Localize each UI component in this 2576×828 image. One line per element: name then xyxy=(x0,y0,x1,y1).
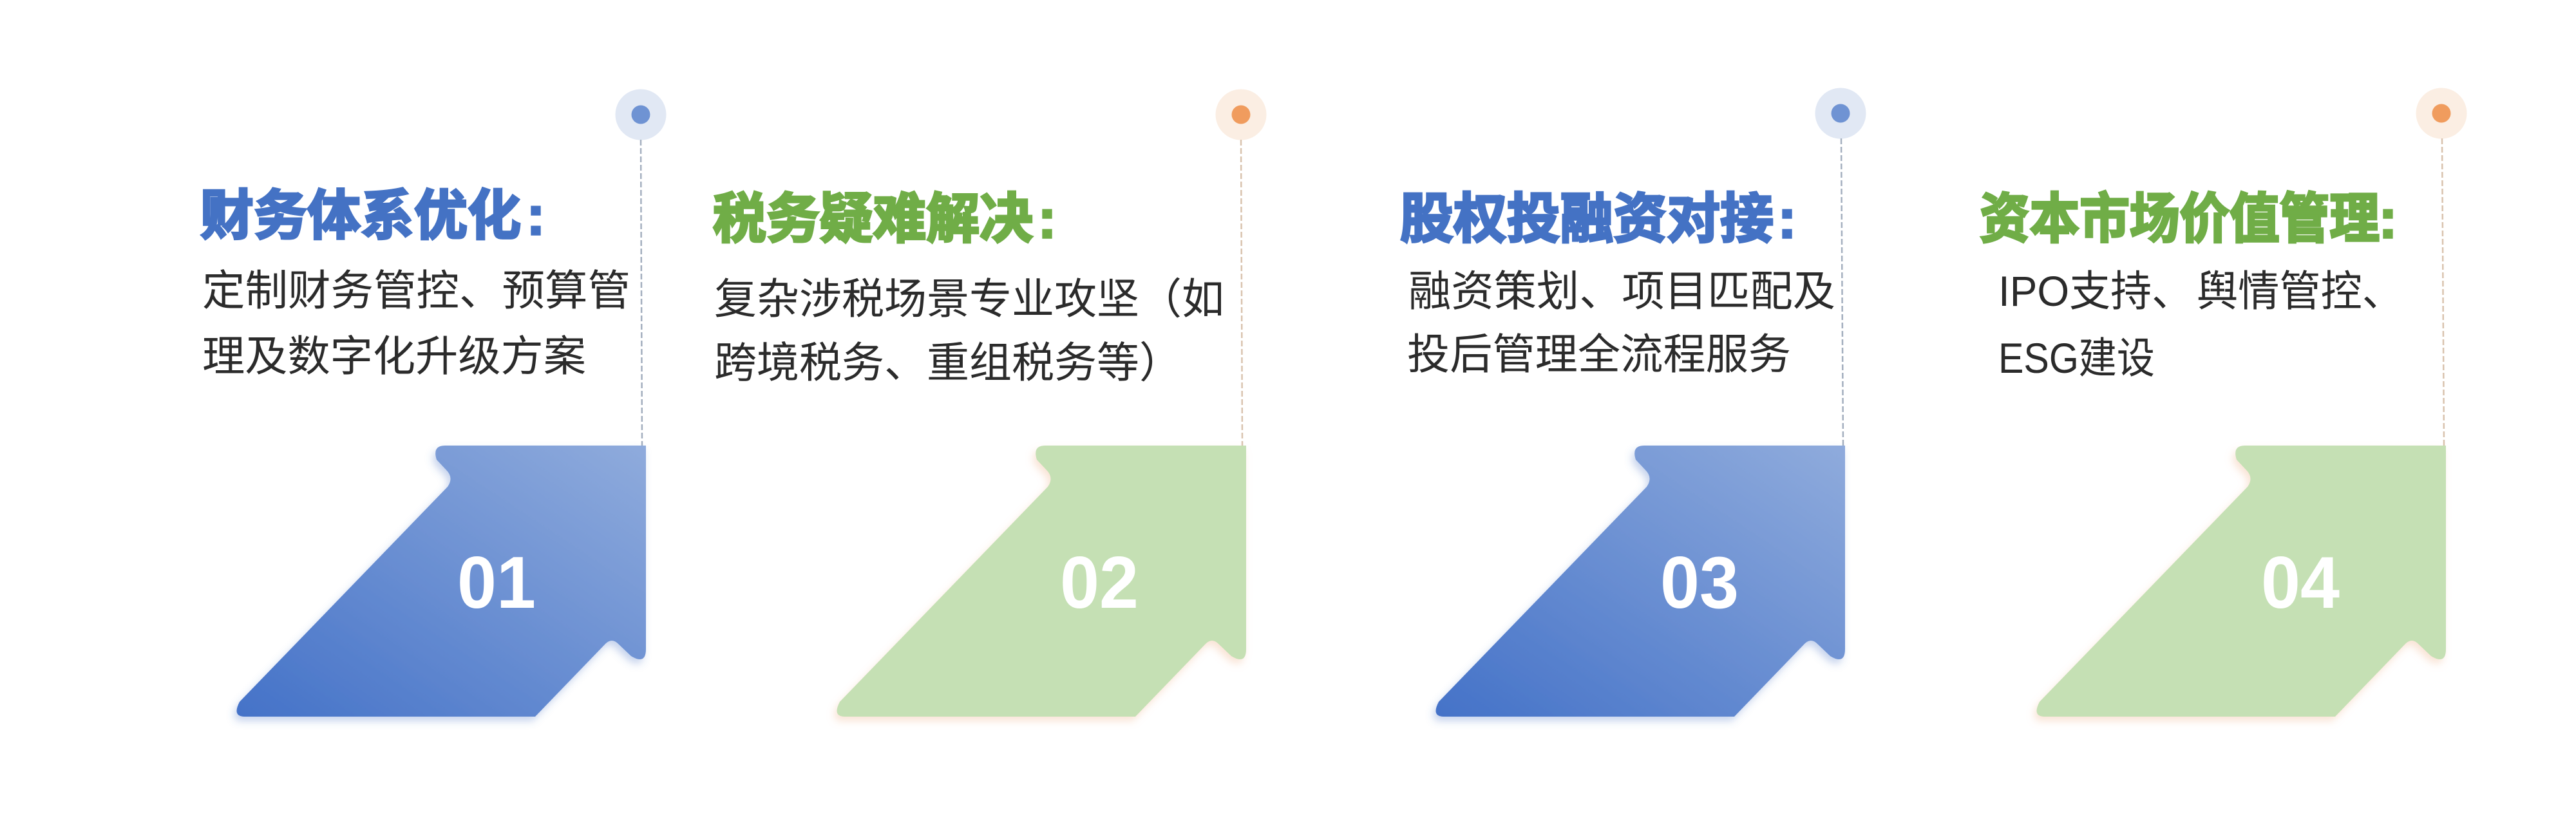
body text: ESG建设 xyxy=(1998,334,2155,382)
heading: : xyxy=(1778,189,1796,249)
marker dot: orange xyxy=(2416,88,2467,139)
body text: IPO支持、 xyxy=(1998,267,2193,315)
number 04: 04 xyxy=(2261,542,2340,624)
body text: 投后管理全流程服务 xyxy=(1407,330,1791,378)
dashed connector line xyxy=(1241,140,1242,446)
heading: 股权投融资对接 xyxy=(1400,189,1774,249)
body text xyxy=(1998,267,2403,382)
panel: 04 capital market value management xyxy=(1980,88,2467,717)
panel: 02 tax problem solving xyxy=(713,89,1266,717)
heading: 税务疑难解决 xyxy=(713,189,1033,249)
number 02: 02 xyxy=(1060,542,1139,624)
body text xyxy=(1407,267,1835,378)
heading: : xyxy=(1038,189,1056,249)
arrow block 01 xyxy=(237,446,646,717)
arrow block 04 xyxy=(2036,446,2446,717)
marker dot: orange xyxy=(1216,89,1266,140)
body text: 定制财务管控、预算管 xyxy=(202,267,630,314)
body text xyxy=(714,275,1224,386)
body text: 理及数字化升级方案 xyxy=(202,332,586,380)
marker dot: blue xyxy=(1815,88,1866,139)
heading: : xyxy=(527,185,545,246)
dashed connector line xyxy=(641,140,642,446)
number 03: 03 xyxy=(1660,542,1739,624)
panel: 01 financial system optimisation xyxy=(200,89,666,717)
body text xyxy=(202,267,630,380)
body text: 融资策划、项目匹配及 xyxy=(1408,267,1835,315)
dashed connector line xyxy=(1841,138,1843,446)
panel: 03 equity financing xyxy=(1400,88,1866,717)
heading: 财务体系优化 xyxy=(200,185,521,246)
body text: 跨境税务、重组税务等） xyxy=(714,339,1182,386)
number 01: 01 xyxy=(457,542,536,624)
body text: 复杂涉税场景专业攻坚（如 xyxy=(714,275,1224,323)
arrow block 03 xyxy=(1436,446,1845,717)
dashed connector line xyxy=(2442,138,2444,446)
arrow block 02 xyxy=(837,446,1246,717)
body text: 舆情管控、 xyxy=(2197,267,2403,315)
heading: : xyxy=(2379,189,2397,249)
heading: 资本市场价值管理 xyxy=(1980,189,2380,249)
marker dot: blue xyxy=(616,89,666,140)
